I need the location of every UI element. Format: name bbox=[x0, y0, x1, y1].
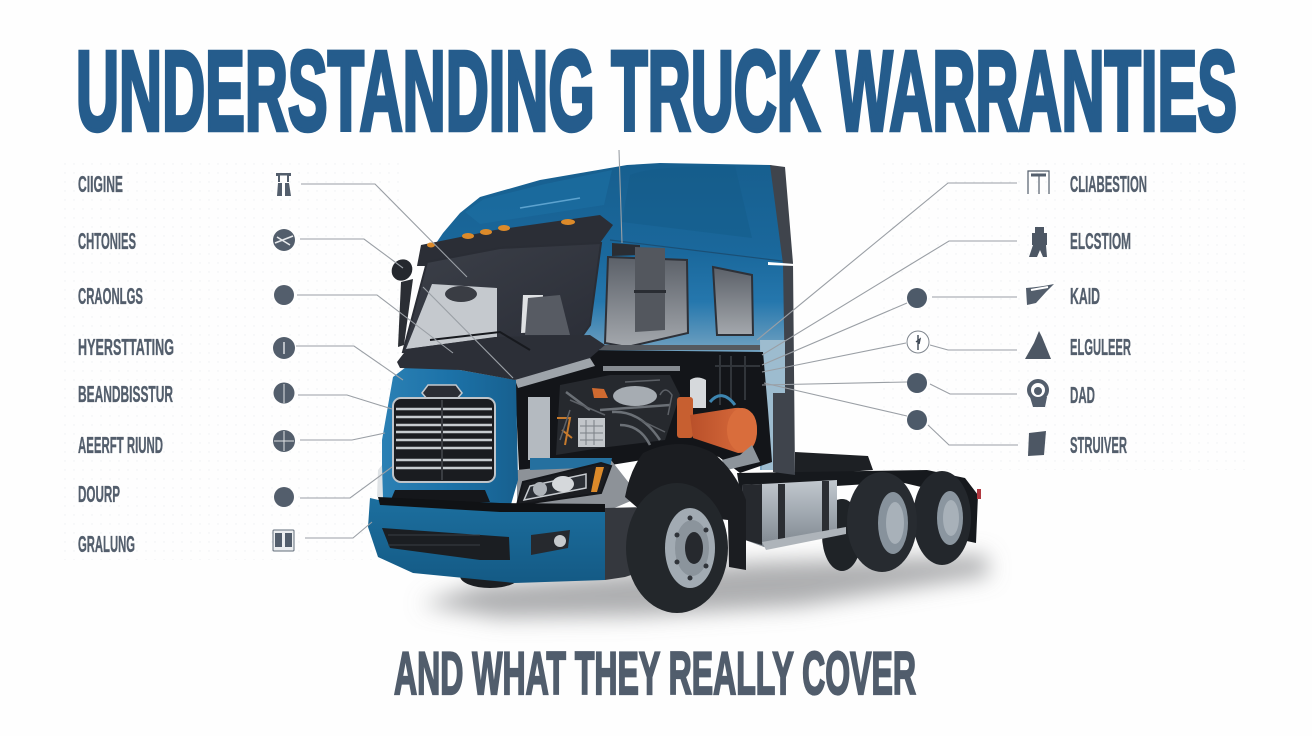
icon: dot six bbox=[273, 430, 295, 452]
icon: dot three bbox=[274, 285, 294, 305]
icon: dot five bbox=[274, 382, 294, 404]
bumper bbox=[368, 497, 650, 583]
left labels: HYERSTTATING bbox=[78, 334, 174, 360]
icon: frame bbox=[1028, 171, 1049, 194]
fog light bbox=[531, 530, 570, 555]
windshield bbox=[403, 243, 601, 352]
left labels: CIIGINE bbox=[78, 171, 123, 197]
text: CLIABESTION bbox=[1070, 171, 1147, 197]
cab rear edge bbox=[770, 165, 795, 475]
badge bbox=[422, 385, 462, 400]
left labels: DOURP bbox=[78, 481, 120, 507]
right labels: KAID bbox=[1070, 283, 1100, 309]
area around headlight bbox=[517, 460, 640, 512]
ground shadow bbox=[420, 555, 990, 618]
right labels: ELGULEER bbox=[1070, 334, 1131, 360]
icon: dot four bbox=[273, 337, 295, 359]
icon: wrench bbox=[1026, 284, 1054, 305]
icon: dot seven bbox=[274, 487, 294, 507]
side windows bbox=[605, 257, 688, 347]
marker lights bbox=[427, 219, 575, 248]
right labels: DAD bbox=[1070, 382, 1095, 408]
left labels: CRAONLGS bbox=[78, 283, 143, 309]
front mirror bbox=[387, 255, 417, 285]
icon: panel bbox=[273, 530, 294, 551]
icon: figure bbox=[276, 173, 291, 196]
headlight bbox=[517, 463, 611, 505]
icon: scroll bbox=[1028, 431, 1046, 456]
hood bbox=[377, 332, 605, 508]
right icons bbox=[1025, 171, 1054, 456]
fuel tank bbox=[742, 480, 846, 550]
truck illustration bbox=[368, 163, 990, 618]
callout lines right bbox=[757, 183, 1018, 445]
callout lines left bbox=[296, 150, 622, 538]
icon: worker bbox=[1029, 227, 1047, 257]
engine bay bbox=[515, 345, 772, 512]
rear wheels bbox=[822, 471, 971, 572]
right labels: ELCSTIOM bbox=[1070, 228, 1131, 254]
chassis and fifth wheel bbox=[737, 452, 981, 543]
left labels: GRALUNG bbox=[78, 531, 135, 557]
right labels: STRUIVER bbox=[1070, 432, 1127, 458]
left icons bbox=[273, 173, 295, 551]
icon: crossed tool bbox=[273, 229, 295, 251]
right mid-line nodes bbox=[907, 288, 929, 430]
icon: tent bbox=[1025, 331, 1051, 359]
side mirror bbox=[612, 243, 640, 256]
left labels: BEANDBISSTUR bbox=[78, 381, 173, 407]
grille bbox=[393, 398, 495, 482]
cab body bbox=[387, 163, 795, 475]
front wheel and fender bbox=[625, 444, 746, 613]
left labels bbox=[78, 171, 174, 557]
left labels: AEERFT RIUND bbox=[78, 432, 163, 458]
left labels: CHTONIES bbox=[78, 228, 136, 254]
icon: ring bbox=[1029, 381, 1047, 407]
far wheel bbox=[460, 564, 520, 588]
right labels bbox=[1070, 171, 1147, 458]
cowl and wipers bbox=[397, 335, 605, 380]
visor bbox=[417, 215, 613, 266]
